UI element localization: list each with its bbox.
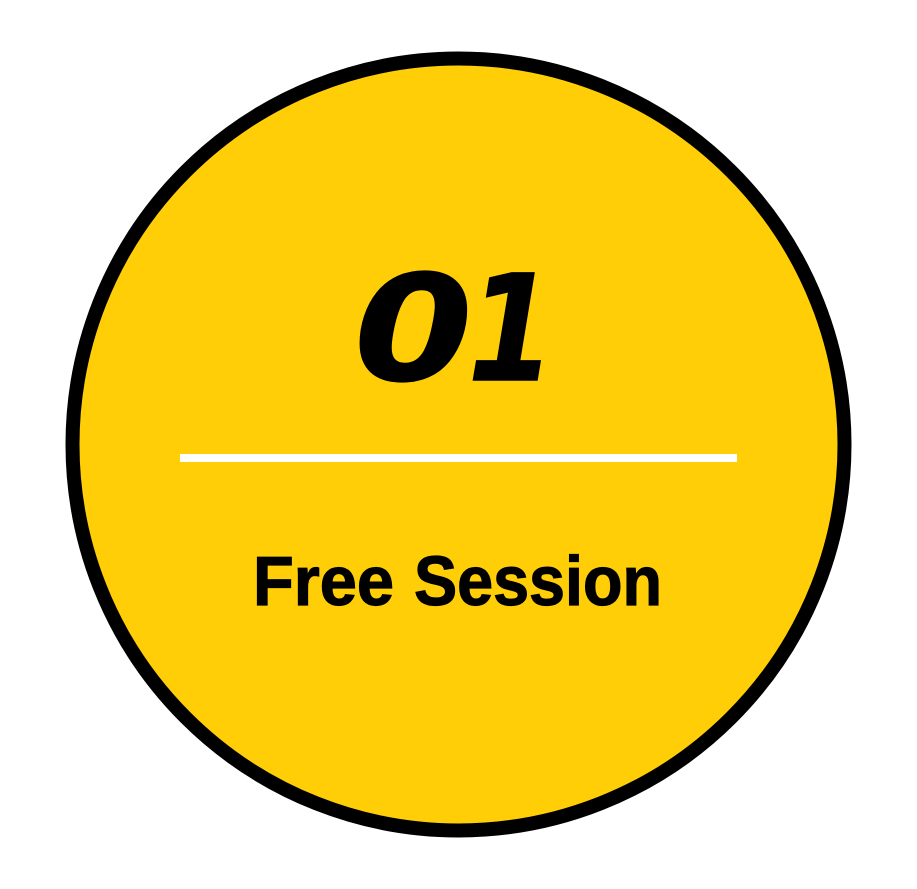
number 01: 0 [354,243,473,415]
yellow circle with black outline [72,58,844,830]
label: Free Session: Session [414,542,662,620]
number 01: 1 [468,244,555,416]
white divider [180,454,737,462]
number 01 [354,243,555,416]
label: Free Session: Free [253,542,394,620]
